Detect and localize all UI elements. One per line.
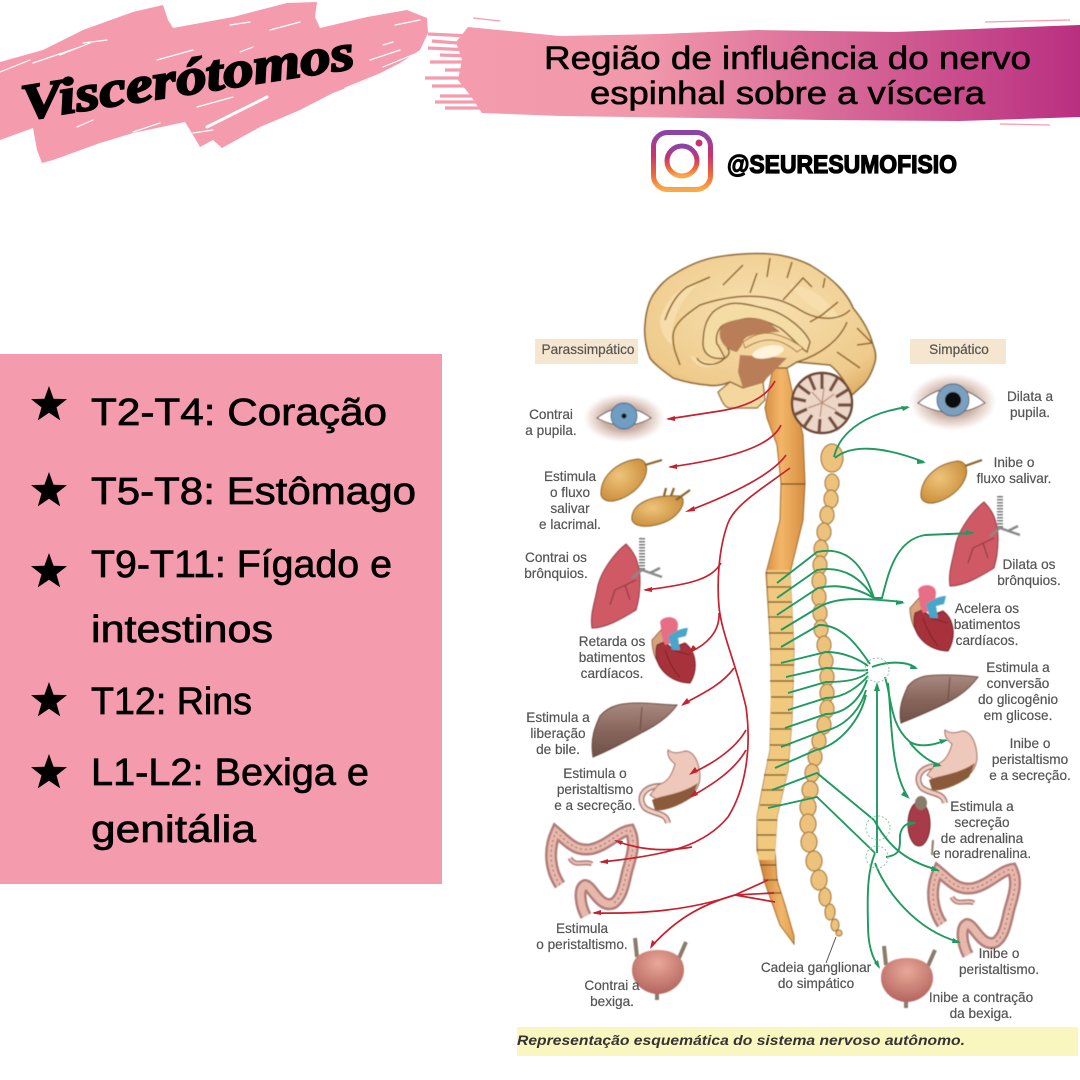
pointer to ganglion chain	[826, 937, 836, 963]
label: dilata brônquios: brônquios.	[997, 573, 1061, 588]
brush stroke: subtitle background	[425, 18, 1080, 125]
parasympathetic nerves	[592, 381, 790, 949]
subtitle: espinhal sobre a víscera	[590, 75, 985, 111]
bladder: left	[632, 938, 686, 1000]
lung: right	[949, 496, 1020, 586]
label: estimula o peristaltismo: Estimula	[556, 921, 609, 936]
stomach: right	[918, 730, 977, 803]
label: acelera batimentos: batimentos	[954, 617, 1020, 632]
lung: left	[591, 538, 662, 628]
label: estimula fluxo salivar	[539, 469, 601, 532]
label: adrenalina: e noradrenalina.	[933, 846, 1031, 861]
label: cadeia ganglionar: do simpático	[778, 976, 854, 991]
label: conversão do glicogênio: Estimula a	[986, 660, 1050, 675]
kidney and adrenal	[908, 796, 933, 855]
heart: left	[652, 617, 695, 683]
label: simpático	[910, 339, 1006, 364]
label: liberação de bile	[526, 710, 590, 757]
label: estimula fluxo salivar: Estimula	[544, 469, 597, 484]
label: inibe o peristaltismo: Inibe o	[979, 946, 1019, 961]
label: dilata a pupila: Dilata a	[1007, 389, 1053, 404]
item: L1-L2: genitália	[91, 809, 257, 851]
label: inibe o peristaltismo: peristaltismo.	[959, 962, 1039, 977]
label: dilata brônquios: Dilata os	[1003, 557, 1056, 572]
colon: left	[551, 830, 633, 916]
label: estimula fluxo salivar: salivar	[550, 501, 590, 516]
instagram handle: @SEURESUMOFISIO	[727, 151, 957, 179]
label: conversão do glicogênio	[978, 660, 1058, 723]
label: inibe contração da bexiga: da bexiga.	[950, 1006, 1012, 1021]
label: adrenalina: de adrenalina	[941, 831, 1024, 846]
label: acelera batimentos: Acelera os	[955, 601, 1019, 616]
colon: right	[933, 869, 1015, 955]
label: inibe peristaltismo	[989, 736, 1071, 783]
label: estimula fluxo salivar: e lacrimal.	[539, 517, 601, 532]
label: conversão do glicogênio: em glicose.	[984, 708, 1052, 723]
cerebellum	[792, 373, 852, 433]
label: dilata brônquios	[997, 557, 1061, 588]
label: cadeia ganglionar: Cadeia ganglionar	[761, 960, 872, 975]
label: estimula fluxo salivar: o fluxo	[550, 485, 590, 500]
label: contrai a pupila: Contrai	[529, 407, 573, 422]
label: contrai a bexiga: Contrai a	[584, 978, 640, 993]
label: liberação de bile: liberação	[530, 726, 586, 741]
item: T9-T11: T9-T11: Fígado e	[91, 544, 392, 586]
label: retarda batimentos: batimentos	[579, 650, 645, 665]
label: inibe contração da bexiga: Inibe a contração	[929, 990, 1033, 1005]
label: cadeia ganglionar	[761, 960, 872, 991]
caption strip: Representação esquemática do sistema nervoso autônomo.	[517, 1033, 965, 1048]
label: contrai a bexiga	[584, 978, 640, 1009]
label: dilata a pupila	[1007, 389, 1053, 420]
label: parassimpático: Parassimpático	[542, 342, 634, 357]
brush stroke: title background	[0, 2, 428, 163]
label: contrai brônquios: brônquios.	[524, 566, 588, 581]
diagram: autonomic nervous system	[517, 254, 1078, 1056]
star bullet 4	[31, 682, 67, 716]
label: inibe fluxo salivar: Inibe o	[994, 455, 1034, 470]
label: adrenalina: Estimula a	[950, 799, 1014, 814]
heart: right	[910, 585, 953, 651]
eye: sympathetic	[909, 373, 997, 431]
label: conversão do glicogênio: conversão	[987, 676, 1049, 691]
icon: instagram	[654, 132, 710, 190]
label: parassimpático	[535, 339, 638, 364]
bladder: right	[881, 946, 935, 1008]
title: Viscerótomos	[17, 25, 358, 132]
item: T5-T8: T5-T8: Estômago	[91, 471, 416, 513]
stomach: left	[641, 750, 700, 823]
label: estimula peristaltismo	[554, 766, 636, 813]
glands: left	[601, 459, 690, 526]
label: dilata a pupila: pupila.	[1010, 405, 1050, 420]
star bullet 2	[31, 472, 67, 506]
liver: right	[900, 675, 978, 723]
subtitle	[544, 40, 1031, 111]
label: retarda batimentos: cardíacos.	[581, 666, 643, 681]
label: estimula peristaltismo: peristaltismo	[557, 782, 633, 797]
star bullet 3	[31, 553, 67, 587]
label: acelera batimentos: cardíacos.	[956, 633, 1018, 648]
label: retarda batimentos: Retarda os	[579, 634, 645, 649]
gland: right	[921, 460, 982, 503]
label: conversão do glicogênio: do glicogênio	[978, 692, 1058, 707]
caption strip	[517, 1027, 1078, 1056]
anatomy artwork	[551, 254, 1020, 1008]
label: inibe fluxo salivar	[977, 455, 1051, 486]
label: inibe contração da bexiga	[929, 990, 1033, 1021]
label: contrai brônquios	[524, 550, 588, 581]
label: liberação de bile: Estimula a	[526, 710, 590, 725]
star bullet 5	[31, 754, 67, 788]
label: contrai a bexiga: bexiga.	[590, 994, 634, 1009]
label: acelera batimentos	[954, 601, 1020, 648]
spinal segment lines	[757, 484, 805, 893]
label: retarda batimentos	[579, 634, 645, 681]
label: inibe peristaltismo: Inibe o	[1010, 736, 1050, 751]
label: simpático: Simpático	[929, 342, 989, 357]
label: contrai a pupila	[525, 407, 577, 438]
sympathetic nerves	[768, 406, 975, 969]
label: inibe peristaltismo: e a secreção.	[989, 768, 1071, 783]
label: estimula peristaltismo: e a secreção.	[554, 798, 636, 813]
subtitle: Região de influência do nervo	[544, 40, 1031, 76]
label: inibe fluxo salivar: fluxo salivar.	[977, 471, 1051, 486]
item: L1-L2	[91, 752, 369, 851]
label: adrenalina: secreção	[954, 815, 1010, 830]
eye: parasympathetic	[583, 393, 665, 443]
label: contrai brônquios: Contrai os	[525, 550, 587, 565]
label: inibe peristaltismo: peristaltismo	[992, 752, 1068, 767]
star bullet 1	[31, 386, 67, 420]
sympathetic ganglion chain	[800, 444, 843, 936]
label: estimula peristaltismo: Estimula o	[563, 766, 627, 781]
item: T9-T11	[91, 544, 392, 651]
brain	[645, 254, 876, 408]
panel: vertebral levels list	[0, 354, 442, 884]
label: contrai a pupila: a pupila.	[525, 423, 577, 438]
spinal cord	[757, 368, 805, 944]
item: T2-T4: T2-T4: Coração	[91, 392, 387, 434]
label: liberação de bile: de bile.	[536, 742, 580, 757]
item: L1-L2: L1-L2: Bexiga e	[91, 752, 369, 794]
label: estimula o peristaltismo	[536, 921, 628, 952]
item: T9-T11: intestinos	[91, 609, 273, 651]
liver: left	[592, 703, 677, 757]
item: T12: T12: Rins	[91, 681, 252, 723]
label: inibe o peristaltismo	[959, 946, 1039, 977]
label: estimula o peristaltismo: o peristaltismo.	[536, 937, 628, 952]
label: adrenalina	[933, 799, 1031, 861]
